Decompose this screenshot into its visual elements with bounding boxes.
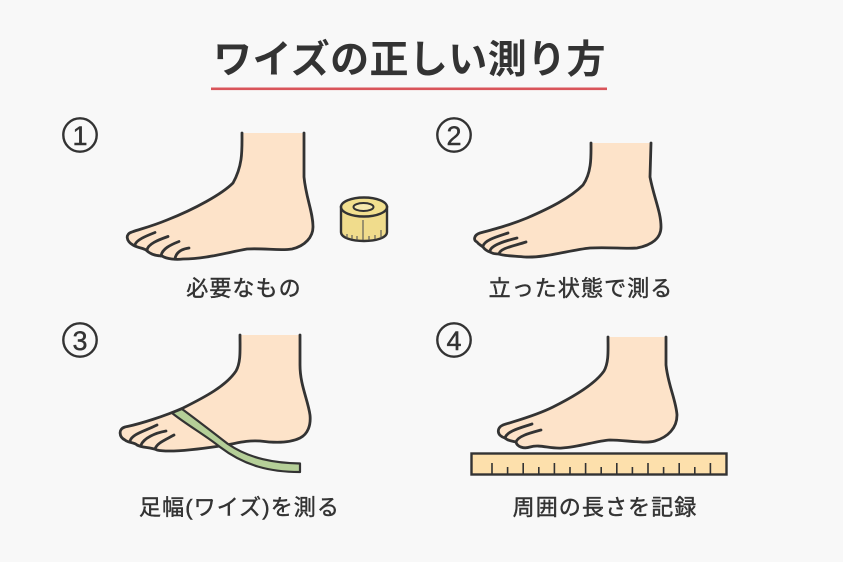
- foot illustration 4: [498, 337, 677, 448]
- label 2: 立った状態で測る: [489, 276, 673, 301]
- panel: step 4: [437, 323, 726, 520]
- label 1: 必要なもの: [186, 276, 302, 301]
- measuring band: [172, 409, 300, 472]
- icon: tape measure: [341, 198, 387, 241]
- foot illustration 1: [127, 133, 313, 259]
- panel: step 2: [437, 118, 673, 301]
- step number 3: [63, 323, 97, 357]
- label 3: 足幅(ワイズ)を測る: [139, 495, 340, 520]
- panel: step 3: [63, 323, 340, 520]
- step number 2: 2: [446, 121, 462, 151]
- step number 4: 4: [446, 326, 462, 356]
- foot illustration 2: [475, 143, 661, 257]
- title: ワイズの正しい測り方: [213, 39, 606, 82]
- step number 1: [63, 118, 97, 152]
- ruler: [472, 454, 726, 474]
- step number 1: 1: [72, 121, 88, 151]
- step number 4: [437, 323, 471, 357]
- panel: step 1: [63, 118, 387, 301]
- foot illustration 3: [120, 335, 310, 472]
- step number 3: 3: [72, 326, 88, 356]
- label 4: 周囲の長さを記録: [513, 495, 697, 520]
- step number 2: [437, 118, 471, 152]
